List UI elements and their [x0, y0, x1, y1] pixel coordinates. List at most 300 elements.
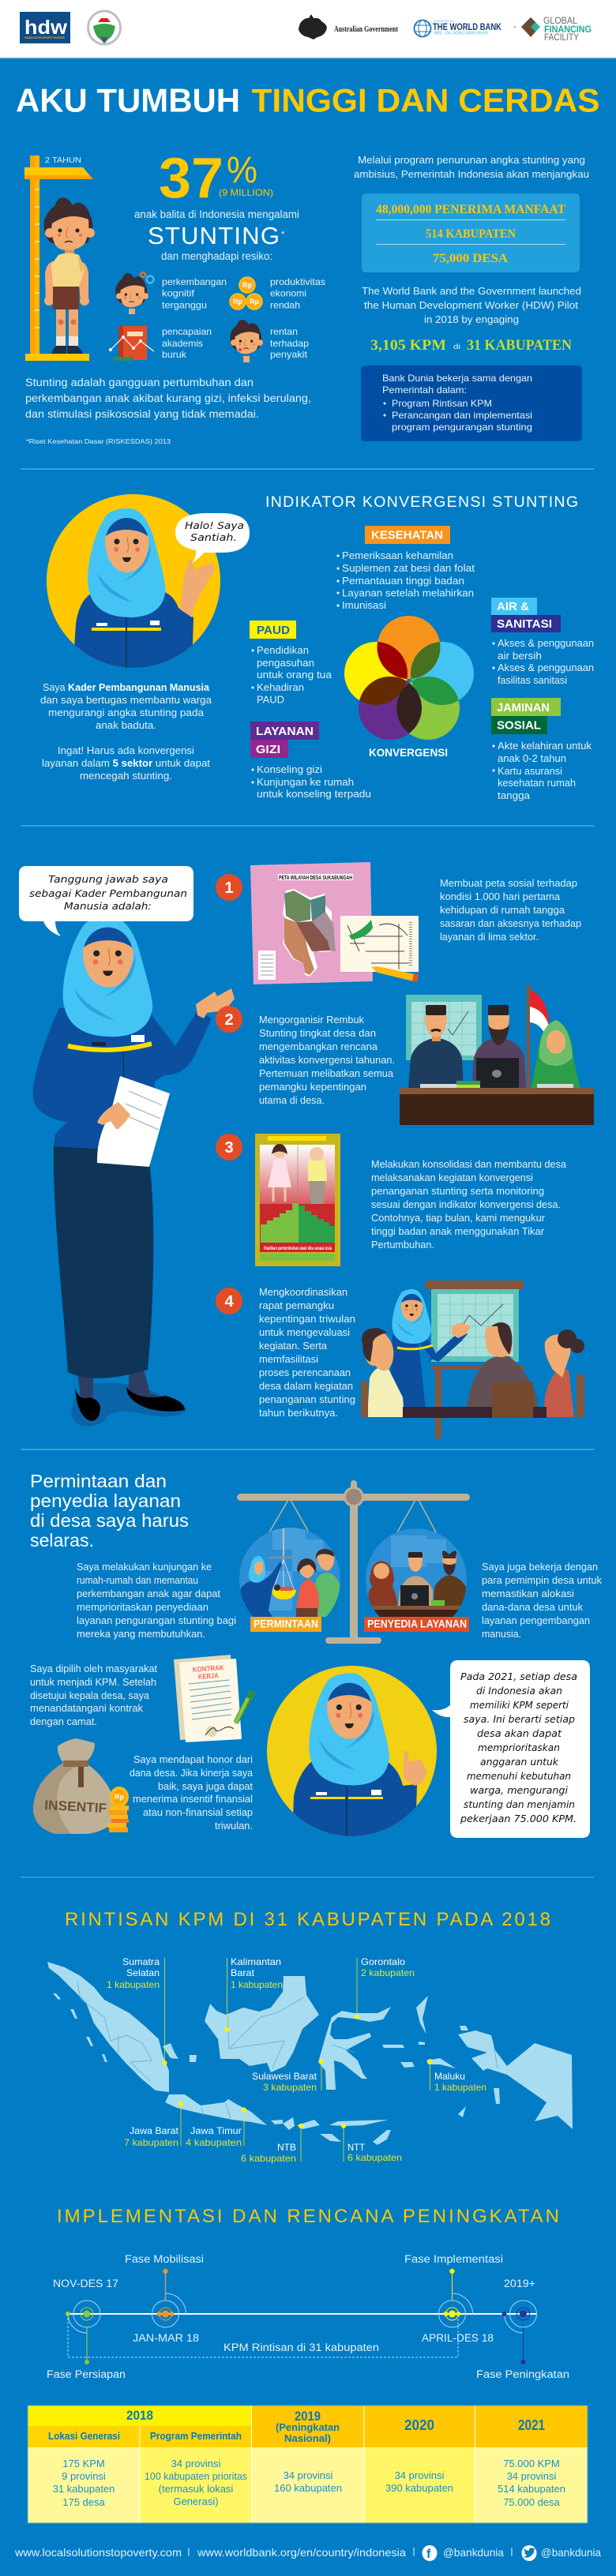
- cooperation box: Bank Dunia bekerja sama dengan: [382, 373, 532, 384]
- intro text: Ingat! Harus ada konvergensi: [58, 744, 194, 756]
- sector: air dan sanitasi: fasilitas sanitasi: [498, 674, 567, 686]
- cooperation box: [361, 366, 582, 441]
- risk: cognitive: terganggu: [162, 299, 207, 310]
- stunting definition: Stunting adalah gangguan pertumbuhan dan: [25, 376, 254, 388]
- speech bubble: 2021 goal: pekerjaan 75.000 KPM.: [460, 1813, 577, 1824]
- timeline span label: KPM Rintisan di 31 kabupaten: [223, 2342, 379, 2353]
- heading: implementation: IMPLEMENTASI DAN RENCANA PENINGKATAN: [57, 2206, 559, 2227]
- sector: air dan sanitasi: Akses & penggunaan: [498, 662, 594, 673]
- illustration: village map: PETA WILAYAH DESA SUKABUNGAH: [279, 876, 352, 881]
- speech bubble: 2021 goal: anggaran untuk: [480, 1757, 559, 1768]
- pilot numbers: di: [453, 343, 460, 351]
- milestone: implementasi: APRIL-DES 18: [422, 2332, 494, 2344]
- title: [16, 82, 600, 118]
- sector: kesehatan: [338, 526, 475, 611]
- sector: PAUD: PAUD: [257, 624, 290, 637]
- text: honorarium: atau non-finansial setiap: [143, 1806, 253, 1818]
- timeline: [47, 2253, 569, 2380]
- step 4: stakeholder meeting: 4: [224, 1293, 234, 1310]
- step 3: growth mat: melaksanakan kegiatan konvergensi: [371, 1172, 533, 1183]
- scale-up table: Nasional): [284, 2432, 331, 2444]
- footnote: *Riset Kesehatan Dasar (RISKESDAS) 2013: [26, 438, 171, 445]
- pilot text: The World Bank and the Government launched: [362, 285, 581, 297]
- height ruler with boy: 2 TAHUN: [45, 156, 81, 165]
- speech bubble: 2021 goal: memenuhi kebutuhan: [467, 1771, 571, 1782]
- map labels: 2 kabupaten: [361, 1967, 415, 1978]
- text: home visits: perkembangan anak agar dapat: [77, 1588, 220, 1599]
- milestone: persiapan: Fase Persiapan: [47, 2368, 126, 2380]
- footer links: www.worldbank.org/en/country/indonesia: [197, 2546, 406, 2559]
- text: home visits: rumah-rumah dan memantau: [77, 1574, 198, 1586]
- step 4: stakeholder meeting: proses perencanaan: [259, 1367, 351, 1378]
- text: selection: dengan camat.: [30, 1715, 97, 1727]
- step 3: growth mat: Melakukan konsolidasi dan membantu desa: [371, 1158, 567, 1170]
- map labels: Selatan: [126, 1967, 160, 1978]
- step 4: stakeholder meeting: memfasilitasi: [259, 1353, 318, 1365]
- speech bubble: 2021 goal: [432, 1660, 590, 1838]
- footer links: @bankdunia: [541, 2546, 601, 2559]
- logo: australian government: Australian Government: [334, 24, 398, 34]
- header logos: [20, 11, 592, 44]
- pilot text: in 2018 by engaging: [424, 313, 519, 325]
- logo: world bank: THE WORLD BANK: [433, 21, 501, 32]
- scale-up table: 31 kabupaten: [53, 2483, 115, 2495]
- scale-up table: Lokasi Generasi: [48, 2430, 120, 2442]
- step 1: social map: 1: [224, 879, 234, 897]
- statistic 37%: %: [227, 148, 257, 190]
- risk: economy: Rp: [242, 281, 252, 289]
- statistic 37%: anak balita di Indonesia mengalami: [134, 208, 299, 220]
- pilot numbers: 3,105 KPM: [370, 337, 446, 354]
- speech bubble: 2021 goal: stunting dan menjamin: [464, 1799, 575, 1810]
- text: selection: untuk menjadi KPM. Setelah: [30, 1676, 156, 1688]
- scale-up table: 390 kabupaten: [385, 2482, 453, 2494]
- step 3: growth mat: 3: [224, 1139, 234, 1157]
- logo: world bank: IBRD · IDA | WORLD BANK GROUP: [434, 32, 489, 36]
- text: village leaders: Saya juga bekerja dengan: [482, 1561, 598, 1573]
- text: village leaders: manusia.: [482, 1628, 521, 1640]
- scale-up table: Program Pemerintah: [150, 2430, 242, 2442]
- logo: global financing facility: FACILITY: [544, 32, 579, 43]
- speech bubble: 2021 goal: saya. Ini berarti setiap: [464, 1714, 575, 1725]
- milestone: mobilisasi: JAN-MAR 18: [133, 2332, 199, 2344]
- cooperation box: Pemerintah dalam:: [382, 384, 467, 396]
- milestone: peningkatan: 2019+: [504, 2278, 535, 2289]
- targets box: 48,000,000 PENERIMA MANFAAT: [376, 203, 565, 216]
- risk: academics: buruk: [162, 349, 187, 360]
- convergence diagram: [344, 616, 474, 759]
- map labels: Jawa Barat: [130, 2125, 179, 2136]
- sector: PAUD: Pendidikan: [257, 644, 309, 656]
- speech bubble: responsibilities: sebagai Kader Pembangunan: [29, 888, 187, 899]
- heading: demand and supply: [30, 1471, 189, 1550]
- intro text: mengurangi angka stunting pada: [48, 707, 205, 718]
- balance scale: [237, 1480, 470, 1644]
- step 1: social map: kondisi 1.000 hari pertama: [440, 891, 561, 902]
- risk: disease: [230, 320, 309, 362]
- logo: ministry emblem: [88, 11, 120, 44]
- step 3: growth mat: Contohnya, tiap bulan, kami mengukur: [371, 1212, 546, 1224]
- illustration: growth poster: Pastikan pertumbuhan anak kita sesuai usia: [264, 1247, 332, 1251]
- scale pan: service providers: PENYEDIA LAYANAN: [367, 1617, 467, 1629]
- step 1: social map: Membuat peta sosial terhadap: [440, 877, 577, 889]
- map labels: Jawa Timur: [190, 2125, 242, 2136]
- map labels: 4 kabupaten: [186, 2137, 242, 2148]
- step 1: social map: kehidupan di rumah tangga: [440, 904, 565, 916]
- sector: jaminan sosial: SOSIAL: [497, 718, 541, 733]
- statistic 37%: dan menghadapi resiko:: [161, 250, 272, 262]
- speech bubble: 2021 goal: Pada 2021, setiap desa: [460, 1671, 577, 1682]
- cooperation box: Program Rintisan KPM: [392, 398, 492, 409]
- text: village leaders: para pemimpin desa untuk: [482, 1574, 602, 1586]
- text: village leaders: layanan pengembangan: [482, 1614, 590, 1626]
- illustration: officials at desk: [400, 984, 594, 1125]
- scale-up table: (termasuk lokasi: [159, 2483, 233, 2495]
- sector: kesehatan: Pemantauan tinggi badan: [342, 575, 464, 587]
- cooperation box: Perancangan dan implementasi: [392, 410, 532, 421]
- illustration: village map: [250, 862, 419, 984]
- milestone: peningkatan: Fase Peningkatan: [476, 2368, 569, 2380]
- sector: kesehatan: Imunisasi: [342, 599, 386, 611]
- intro text: mencegah stunting.: [80, 770, 172, 782]
- statistic 37%: STUNTING: [148, 222, 280, 249]
- scale-up table: 2018: [126, 2408, 153, 2423]
- scale-up table: 34 provinsi: [395, 2469, 445, 2481]
- panel: stunting overview: [24, 147, 589, 445]
- sector: jaminan sosial: kesehatan rumah: [498, 777, 576, 789]
- scale-up table: 9 provinsi: [62, 2470, 106, 2482]
- scale pan: service providers: [364, 1528, 469, 1632]
- icon: twitter: [521, 2545, 537, 2561]
- step 1: social map: sasaran dan aksesnya terhadap: [440, 917, 581, 929]
- illustration: presentation: [361, 1281, 584, 1438]
- sector: jaminan sosial: [491, 698, 592, 801]
- text: home visits: [77, 1561, 236, 1640]
- icon: facebook: [422, 2545, 438, 2561]
- risk: academics: pencapaian: [162, 326, 212, 337]
- scale-up table: 34 provinsi: [284, 2469, 333, 2481]
- pilot numbers: [370, 337, 572, 354]
- speech bubble: 2021 goal: warga, mengurangi: [470, 1785, 569, 1796]
- text: selection: Saya dipilih oleh masyarakat: [30, 1663, 157, 1674]
- panel: responsibilities: [19, 862, 594, 1438]
- pilot numbers: 31 KABUPATEN: [467, 337, 572, 354]
- title: TINGGI DAN CERDAS: [251, 82, 600, 118]
- targets box: 75,000 DESA: [433, 252, 508, 265]
- sector: kesehatan: Suplemen zat besi dan folat: [342, 562, 475, 574]
- footer links: [14, 2545, 601, 2561]
- step 1: social map: [216, 862, 581, 984]
- step 2: village meeting: aktivitas konvergensi tahunan.: [259, 1054, 395, 1066]
- milestone: persiapan: NOV-DES 17: [53, 2278, 118, 2289]
- heading: pilot map: RINTISAN KPM DI 31 KABUPATEN PADA 2018: [65, 1909, 550, 1930]
- icon: work contract: KONTRAK: [192, 1663, 224, 1674]
- text: selection: disetujui kepala desa, saya: [30, 1689, 150, 1701]
- logo: hdw: [20, 12, 70, 43]
- map labels: 1 kabupaten: [231, 1979, 283, 1990]
- milestone: mobilisasi: Fase Mobilisasi: [125, 2253, 204, 2265]
- map labels: Gorontalo: [361, 1956, 405, 1967]
- logo: global financing facility: [514, 15, 592, 43]
- statistic 37%: 37: [159, 147, 223, 210]
- sector: PAUD: Kehadiran: [257, 681, 304, 693]
- sector: PAUD: [250, 621, 332, 706]
- icon: facebook: f: [426, 2548, 431, 2561]
- text: village leaders: memastikan alokasi: [482, 1588, 574, 1599]
- sector: kesehatan: Layanan setelah melahirkan: [342, 587, 474, 598]
- step 4: stakeholder meeting: desa dalam kegiatan: [259, 1380, 353, 1392]
- government program intro: [354, 154, 589, 180]
- step 2: village meeting: Mengorganisir Rembuk: [259, 1014, 364, 1026]
- step 2: village meeting: mengembangkan rencana: [259, 1041, 378, 1052]
- text: honorarium: menerima insentif finansial: [133, 1793, 253, 1805]
- map of Indonesia: [47, 1962, 573, 2145]
- scale-up table: Generasi): [173, 2495, 219, 2507]
- height ruler with boy: [24, 156, 95, 361]
- speech bubble: 2021 goal: di Indonesia akan: [476, 1685, 562, 1697]
- milestone: implementasi: [404, 2253, 503, 2344]
- step 2: village meeting: [216, 984, 594, 1125]
- step 4: stakeholder meeting: rapat pemangku: [259, 1299, 334, 1311]
- milestone: implementasi: Fase Implementasi: [404, 2253, 503, 2265]
- sector: jaminan sosial: Kartu asuransi: [498, 765, 562, 777]
- stunting definition: [25, 376, 311, 420]
- sector: kesehatan: Pemeriksaan kehamilan: [342, 549, 453, 561]
- risk: economy: rendah: [270, 299, 300, 310]
- step 3: growth mat: sesuai dengan indikator konvergensi desa.: [371, 1198, 561, 1210]
- sector: air dan sanitasi: AIR &: [497, 600, 529, 613]
- step 3: growth mat: tinggi badan anak menggunakan Tikar: [371, 1225, 545, 1237]
- map labels: 1 kabupaten: [107, 1979, 160, 1990]
- text: village leaders: [482, 1561, 602, 1640]
- step 3: growth mat: penanganan stunting serta monitoring: [371, 1185, 544, 1197]
- milestone: persiapan: [47, 2278, 126, 2380]
- scale-up table: 34 provinsi: [171, 2458, 221, 2469]
- logo: world bank: [414, 19, 501, 36]
- text: selection: [30, 1663, 157, 1727]
- map labels: 6 kabupaten: [241, 2153, 296, 2164]
- scale-up table: 2019: [295, 2409, 321, 2424]
- logo: australian government: [299, 14, 398, 39]
- milestone: peningkatan: [476, 2278, 569, 2380]
- map labels: Maluku: [434, 2071, 465, 2082]
- sector: layanan gizi: [250, 722, 371, 800]
- logo: global financing facility: FINANCING: [544, 24, 592, 35]
- scale-up table: 514 kabupaten: [498, 2483, 565, 2495]
- sector: layanan gizi: untuk konseling terpadu: [257, 788, 371, 800]
- risk: disease: penyakit: [270, 349, 308, 360]
- scale-up table: 100 kabupaten prioritas: [145, 2470, 247, 2482]
- icon: work contract: [174, 1655, 257, 1742]
- scale-up table: 75.000 desa: [503, 2496, 561, 2508]
- text: selection: menandatangani kontrak: [30, 1702, 143, 1714]
- risk: economy: [230, 276, 325, 310]
- statistic 37%: (9 MILLION): [219, 187, 273, 198]
- intro text: dan saya bertugas membantu warga: [40, 694, 212, 706]
- sector: PAUD: PAUD: [257, 693, 284, 706]
- logo: hdw: HUMAN DEVELOPMENT WORKER: [24, 36, 65, 39]
- risk: cognitive: perkembangan: [162, 276, 227, 287]
- text: village leaders: dana-dana desa untuk: [482, 1601, 583, 1613]
- sector: layanan gizi: GIZI: [256, 743, 280, 756]
- sector: jaminan sosial: Akte kelahiran untuk: [498, 740, 592, 752]
- text: honorarium: baik, saya juga dapat: [158, 1780, 253, 1792]
- map labels: 3 kabupaten: [263, 2082, 317, 2093]
- stunting definition: dan stimulasi psikososial yang tidak memadai.: [25, 407, 259, 420]
- step 4: stakeholder meeting: kegiatan. Serta: [259, 1340, 328, 1352]
- character: Santiah standing: [33, 917, 235, 1427]
- step 4: stakeholder meeting: [216, 1281, 584, 1438]
- text: honorarium: triwulan.: [215, 1820, 253, 1832]
- step 2: village meeting: pemangku kepentingan: [259, 1081, 366, 1093]
- map labels: 7 kabupaten: [124, 2137, 178, 2148]
- title: AKU TUMBUH: [16, 82, 240, 118]
- map labels: 6 kabupaten: [347, 2152, 402, 2163]
- text: home visits: Saya melakukan kunjungan ke: [77, 1561, 212, 1573]
- sector: layanan gizi: Konseling gizi: [257, 763, 322, 775]
- footer links: www.localsolutionstopoverty.com: [14, 2546, 182, 2559]
- icon: incentive bag: [33, 1738, 129, 1834]
- map labels: Kalimantan: [231, 1956, 281, 1967]
- speech bubble: hello: Santiah.: [190, 532, 237, 543]
- risk: disease: rentan: [270, 326, 298, 337]
- risk: cognitive: [115, 272, 227, 314]
- stunting definition: perkembangan anak akibat kurang gizi, infeksi berulang,: [25, 392, 311, 404]
- step 4: stakeholder meeting: untuk mengevaluasi: [259, 1326, 350, 1338]
- panel: implementation plan: [28, 2206, 588, 2523]
- step 4: stakeholder meeting: tahun berikutnya.: [259, 1407, 338, 1419]
- scale-up table: 175 desa: [62, 2496, 106, 2508]
- step 4: stakeholder meeting: Mengkoordinasikan: [259, 1286, 347, 1298]
- speech bubble: responsibilities: [19, 866, 193, 936]
- intro text: anak baduta.: [96, 719, 156, 731]
- step 4: stakeholder meeting: penanganan stunting: [259, 1393, 355, 1405]
- sector: PAUD: pengasuhan: [257, 657, 314, 669]
- risk: academics: akademis: [162, 338, 203, 349]
- text: home visits: memprioritaskan penyediaan: [77, 1601, 208, 1613]
- scale pan: demand: PERMINTAAN: [254, 1617, 318, 1629]
- step 3: growth mat: [216, 1134, 567, 1266]
- map labels: Barat: [231, 1967, 255, 1978]
- icon: work contract: KERJA: [197, 1671, 219, 1681]
- intro text: Saya Kader Pembangunan Manusia: [43, 681, 210, 693]
- step 2: village meeting: Pertemuan melibatkan semua: [259, 1067, 394, 1079]
- sector: air dan sanitasi: [491, 598, 594, 686]
- targets box: 514 KABUPATEN: [426, 227, 516, 241]
- risk: disease: terhadap: [270, 338, 309, 349]
- sector: air dan sanitasi: SANITASI: [497, 617, 552, 631]
- panel: pilot map: [47, 1909, 573, 2164]
- step 3: growth mat: Pertumbuhan.: [371, 1239, 434, 1251]
- sector: layanan gizi: Kunjungan ke rumah: [257, 776, 354, 788]
- speech bubble: responsibilities: Manusia adalah:: [64, 901, 152, 912]
- convergence diagram: KONVERGENSI: [369, 746, 448, 759]
- heading: demand and supply: selaras.: [30, 1530, 94, 1550]
- text: home visits: layanan pengurangan stunting bagi: [77, 1614, 236, 1626]
- logo: global financing facility: GLOBAL: [543, 15, 577, 26]
- risk: economy: ekonomi: [270, 288, 306, 299]
- sector: jaminan sosial: anak 0-2 tahun: [498, 752, 566, 764]
- scale-up table: (Peningkatan: [276, 2421, 340, 2433]
- scale-up table: 160 kabupaten: [274, 2482, 342, 2494]
- government program intro: Melalui program penurunan angka stunting yang: [358, 154, 585, 166]
- heading: convergence indicators: INDIKATOR KONVERGENSI STUNTING: [265, 493, 578, 511]
- scale pan: demand: [239, 1528, 340, 1632]
- pilot text: [362, 285, 581, 325]
- step 2: village meeting: Stunting tingkat desa dan: [259, 1027, 376, 1039]
- footer links: @bankdunia: [443, 2546, 504, 2559]
- statistic 37%: *: [281, 230, 285, 239]
- icon: incentive bag: INSENTIF: [44, 1798, 107, 1816]
- map labels: Sulawesi Barat: [252, 2071, 317, 2082]
- risk: economy: Rp: [233, 298, 242, 306]
- risk: economy: Rp: [250, 298, 259, 306]
- panel: demand and supply: [30, 1471, 602, 1841]
- text: home visits: mereka yang membutuhkan.: [77, 1628, 205, 1640]
- heading: demand and supply: Permintaan dan: [30, 1471, 167, 1491]
- milestone: mobilisasi: [125, 2253, 204, 2344]
- sector: layanan gizi: LAYANAN: [256, 725, 314, 738]
- scale-up table: 75.000 KPM: [503, 2458, 560, 2469]
- scale-up table: 175 KPM: [62, 2458, 105, 2469]
- cooperation box: program pengurangan stunting: [392, 422, 532, 433]
- map labels: Sumatra: [122, 1956, 160, 1967]
- sector: kesehatan: KESEHATAN: [371, 529, 443, 542]
- speech bubble: responsibilities: Tanggung jawab saya: [48, 874, 168, 885]
- scale-up table: 2021: [518, 2417, 545, 2433]
- speech bubble: 2021 goal: memprioritaskan: [478, 1742, 560, 1753]
- speech bubble: hello: Halo! Saya: [185, 520, 244, 531]
- map labels: NTB: [277, 2142, 296, 2153]
- step 1: social map: layanan di lima sektor.: [440, 931, 539, 943]
- icon: incentive bag: Rp: [115, 1793, 124, 1801]
- text: honorarium: Saya mendapat honor dari: [133, 1753, 253, 1765]
- heading: demand and supply: di desa saya harus: [30, 1510, 189, 1531]
- intro text: [40, 681, 212, 782]
- sector: PAUD: untuk orang tua: [257, 669, 332, 681]
- character: Santiah greeting: [47, 494, 220, 671]
- sector: air dan sanitasi: Akses & penggunaan: [498, 637, 594, 649]
- map labels: 1 kabupaten: [434, 2082, 486, 2093]
- targets box: [362, 193, 580, 272]
- risk: cognitive: kognitif: [162, 288, 195, 299]
- step 2: village meeting: 2: [224, 1011, 234, 1029]
- risk: academics: [109, 326, 212, 361]
- speech bubble: 2021 goal: memiliki KPM seperti: [470, 1700, 569, 1711]
- pilot text: the Human Development Worker (HDW) Pilot: [364, 299, 578, 311]
- logo: hdw: hdw: [24, 17, 68, 39]
- government program intro: ambisius, Pemerintah Indonesia akan menjangkau: [354, 168, 589, 180]
- step 4: stakeholder meeting: kepentingan triwulan: [259, 1313, 355, 1325]
- logo: world bank: SUPPORTED BY: [434, 19, 453, 23]
- risk: economy: produktivitas: [270, 276, 325, 287]
- sector: jaminan sosial: tangga: [498, 789, 531, 801]
- speech bubble: hello: [175, 513, 250, 563]
- sector: air dan sanitasi: air bersih: [498, 650, 542, 662]
- speech bubble: 2021 goal: desa akan dapat: [477, 1728, 562, 1739]
- scale-up table: 2020: [404, 2417, 434, 2433]
- character: Santiah thumbs up: [267, 1666, 437, 1841]
- illustration: growth poster: [255, 1134, 340, 1266]
- step 2: village meeting: utama di desa.: [259, 1094, 325, 1106]
- statistic 37%: [134, 147, 299, 262]
- heading: demand and supply: penyedia layanan: [30, 1490, 181, 1511]
- text: honorarium: [130, 1753, 254, 1832]
- panel: convergence: [40, 493, 594, 801]
- map labels: [107, 1956, 486, 2164]
- scale-up table: [28, 2405, 588, 2523]
- text: honorarium: dana desa. Jika kinerja saya: [130, 1767, 254, 1779]
